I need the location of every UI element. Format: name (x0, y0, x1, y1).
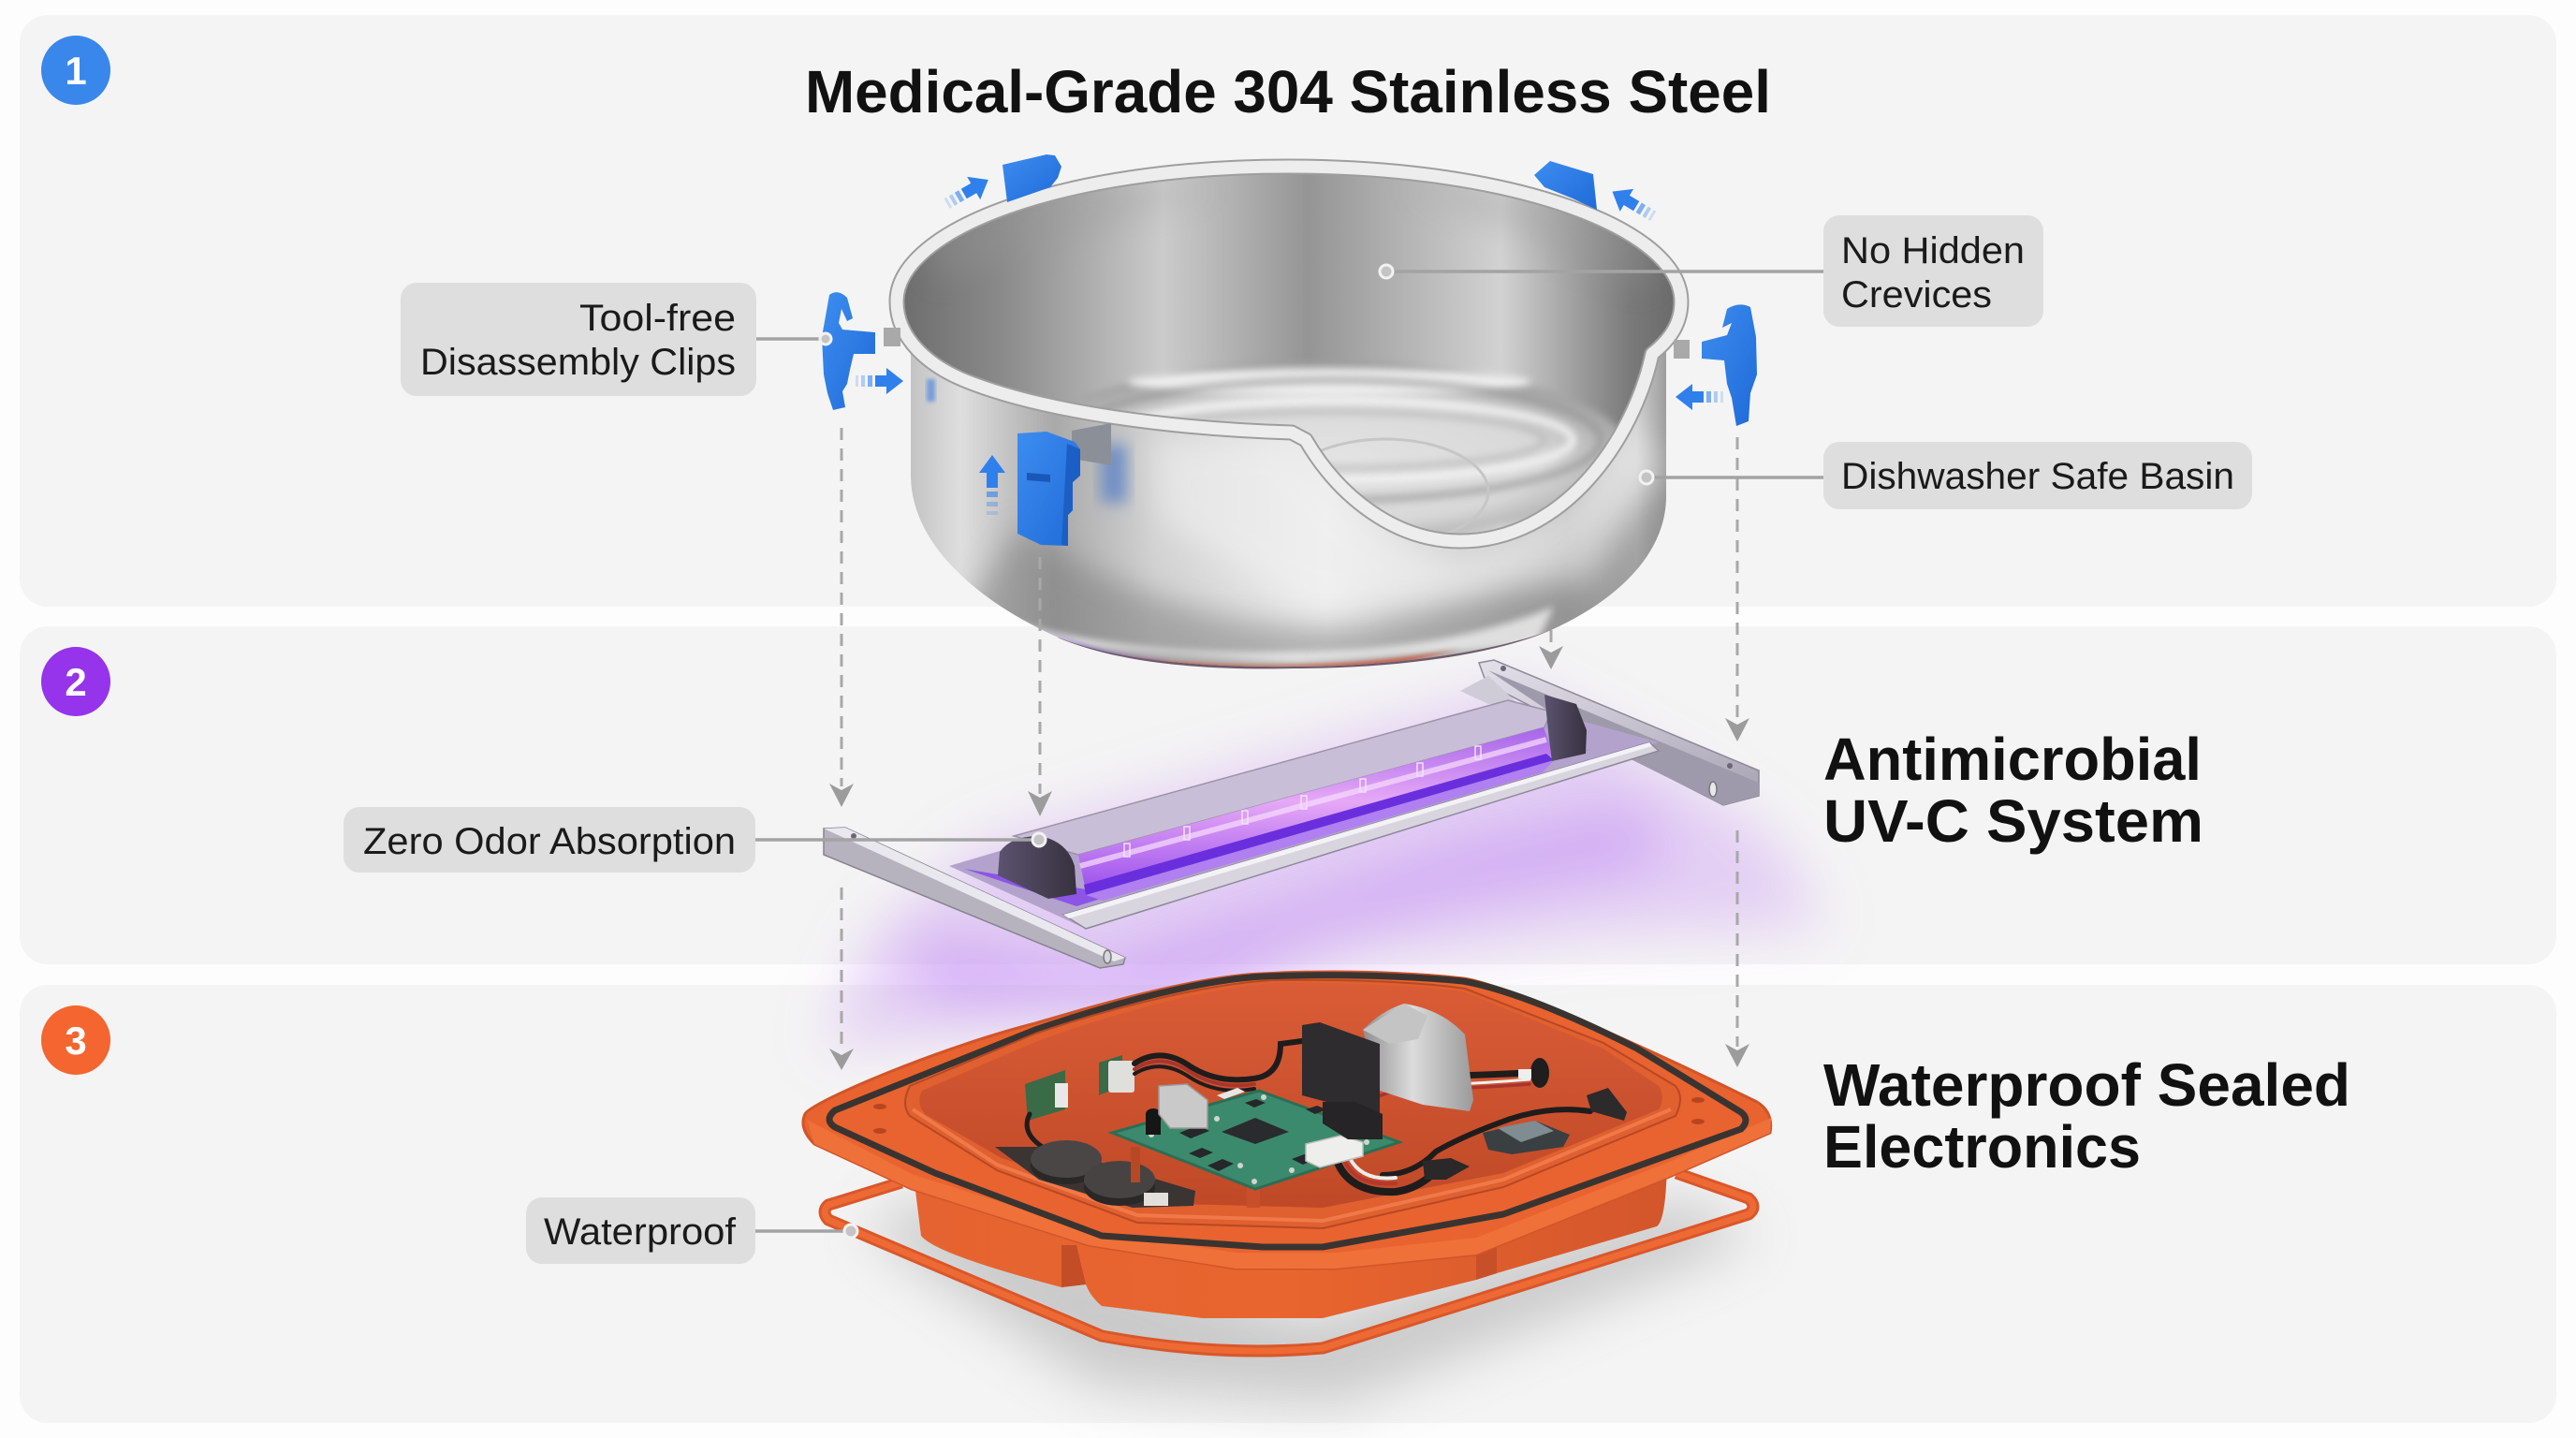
frame tray (949, 700, 1659, 929)
housing lower body (912, 1161, 1667, 1318)
heading: Waterproof Sealed Electronics: Electronics (1823, 1113, 2141, 1181)
housing interior (919, 983, 1662, 1208)
clip: right (1702, 304, 1757, 426)
badge 1: 1 (65, 49, 87, 93)
right mounting bracket (1460, 660, 1759, 805)
callout: Dishwasher Safe Basin (1640, 442, 2252, 509)
badge 1 (41, 36, 110, 105)
panel 2: UV-C system (20, 626, 2556, 964)
basin rim (897, 167, 1681, 541)
clip: left (822, 292, 875, 410)
callout: Tool-free Disassembly Clips (401, 283, 831, 396)
guide arrowheads (829, 646, 1749, 1070)
inner ledge (905, 980, 1680, 1228)
callout: Waterproof: Waterproof (544, 1211, 737, 1253)
badge 2 (41, 647, 110, 716)
grommet (1518, 1058, 1549, 1088)
housing top flange (803, 972, 1771, 1269)
panel 3: waterproof electronics (20, 985, 2556, 1423)
ledge ridge (913, 1109, 1671, 1221)
housing ground shadow (861, 1198, 1760, 1404)
lamp reflector housing (1014, 700, 1551, 855)
clip hinges (884, 328, 1690, 465)
arrow: front up (979, 455, 1005, 515)
basin interior (904, 174, 1674, 534)
callout: Tool-free Disassembly Clips: Tool-free (579, 298, 736, 339)
clip: top right (1534, 161, 1597, 210)
title: Medical-Grade 304 Stainless Steel (805, 58, 1771, 125)
callout: No Hidden Crevices (1380, 215, 2043, 327)
circuit board (1112, 1084, 1399, 1208)
UV glow (824, 688, 1825, 1049)
electronics housing (803, 972, 1771, 1404)
callout: Zero Odor Absorption: Zero Odor Absorption (363, 821, 736, 862)
callout: Zero Odor Absorption (344, 807, 1046, 873)
arrow: top left (941, 169, 995, 215)
callout: Tool-free Disassembly Clips: Disassembly Clips (420, 342, 736, 383)
clip: front (1017, 432, 1080, 546)
badge 3 (41, 1005, 110, 1075)
basin outer body (899, 337, 1676, 674)
heading: Antimicrobial UV-C System: Antimicrobial (1823, 726, 2202, 793)
blue clips (822, 154, 1757, 546)
arrow: right (1676, 384, 1723, 410)
lower silver rail (1063, 742, 1659, 929)
UV-C lamp assembly (824, 660, 1759, 968)
small sensor board A (1025, 1070, 1068, 1121)
heading: Waterproof Sealed Electronics (1823, 1051, 2350, 1181)
wiring harness (1027, 1041, 1590, 1192)
right side components (1423, 1088, 1627, 1180)
arrow: top right (1605, 181, 1660, 227)
arrow: left (856, 368, 903, 394)
dashed assembly guides (829, 428, 1749, 1070)
UV lamp window (1078, 727, 1554, 891)
left lamp cap (998, 836, 1076, 899)
badge 2: 2 (65, 660, 87, 704)
callout: No Hidden Crevices: Crevices (1841, 274, 1992, 315)
basin lower underside tint (1058, 630, 1551, 668)
UV lamp band (1084, 754, 1554, 895)
right lamp cap (1544, 695, 1587, 761)
motion arrows (856, 169, 1723, 515)
lamp tick marks (1124, 746, 1481, 857)
callout: Waterproof (526, 1197, 857, 1264)
badge 3: 3 (65, 1019, 87, 1063)
heading: Antimicrobial UV-C System: UV-C System (1823, 787, 2203, 855)
callout: No Hidden Crevices: No Hidden (1841, 230, 2025, 271)
blower motor (1302, 1004, 1473, 1139)
panel 1: stainless steel basin (20, 15, 2556, 607)
orange gasket loop (825, 1173, 1753, 1351)
capacitor pack (995, 1140, 1195, 1208)
small sensor board B (1099, 1055, 1134, 1095)
stainless steel basin (889, 159, 1694, 674)
heading: Waterproof Sealed Electronics: Waterproof Sealed (1823, 1051, 2350, 1119)
heading: Antimicrobial UV-C System (1823, 726, 2203, 855)
clip: top left (1003, 154, 1061, 202)
callout: Dishwasher Safe Basin: Dishwasher Safe Basin (1841, 456, 2234, 497)
flange bolt holes (873, 1097, 1705, 1134)
housing flange front lip (807, 1118, 1771, 1269)
black seal (829, 976, 1746, 1247)
tray purple floor (964, 749, 1591, 906)
left mounting bracket (824, 828, 1125, 968)
blue reflections on basin (1101, 445, 1127, 503)
